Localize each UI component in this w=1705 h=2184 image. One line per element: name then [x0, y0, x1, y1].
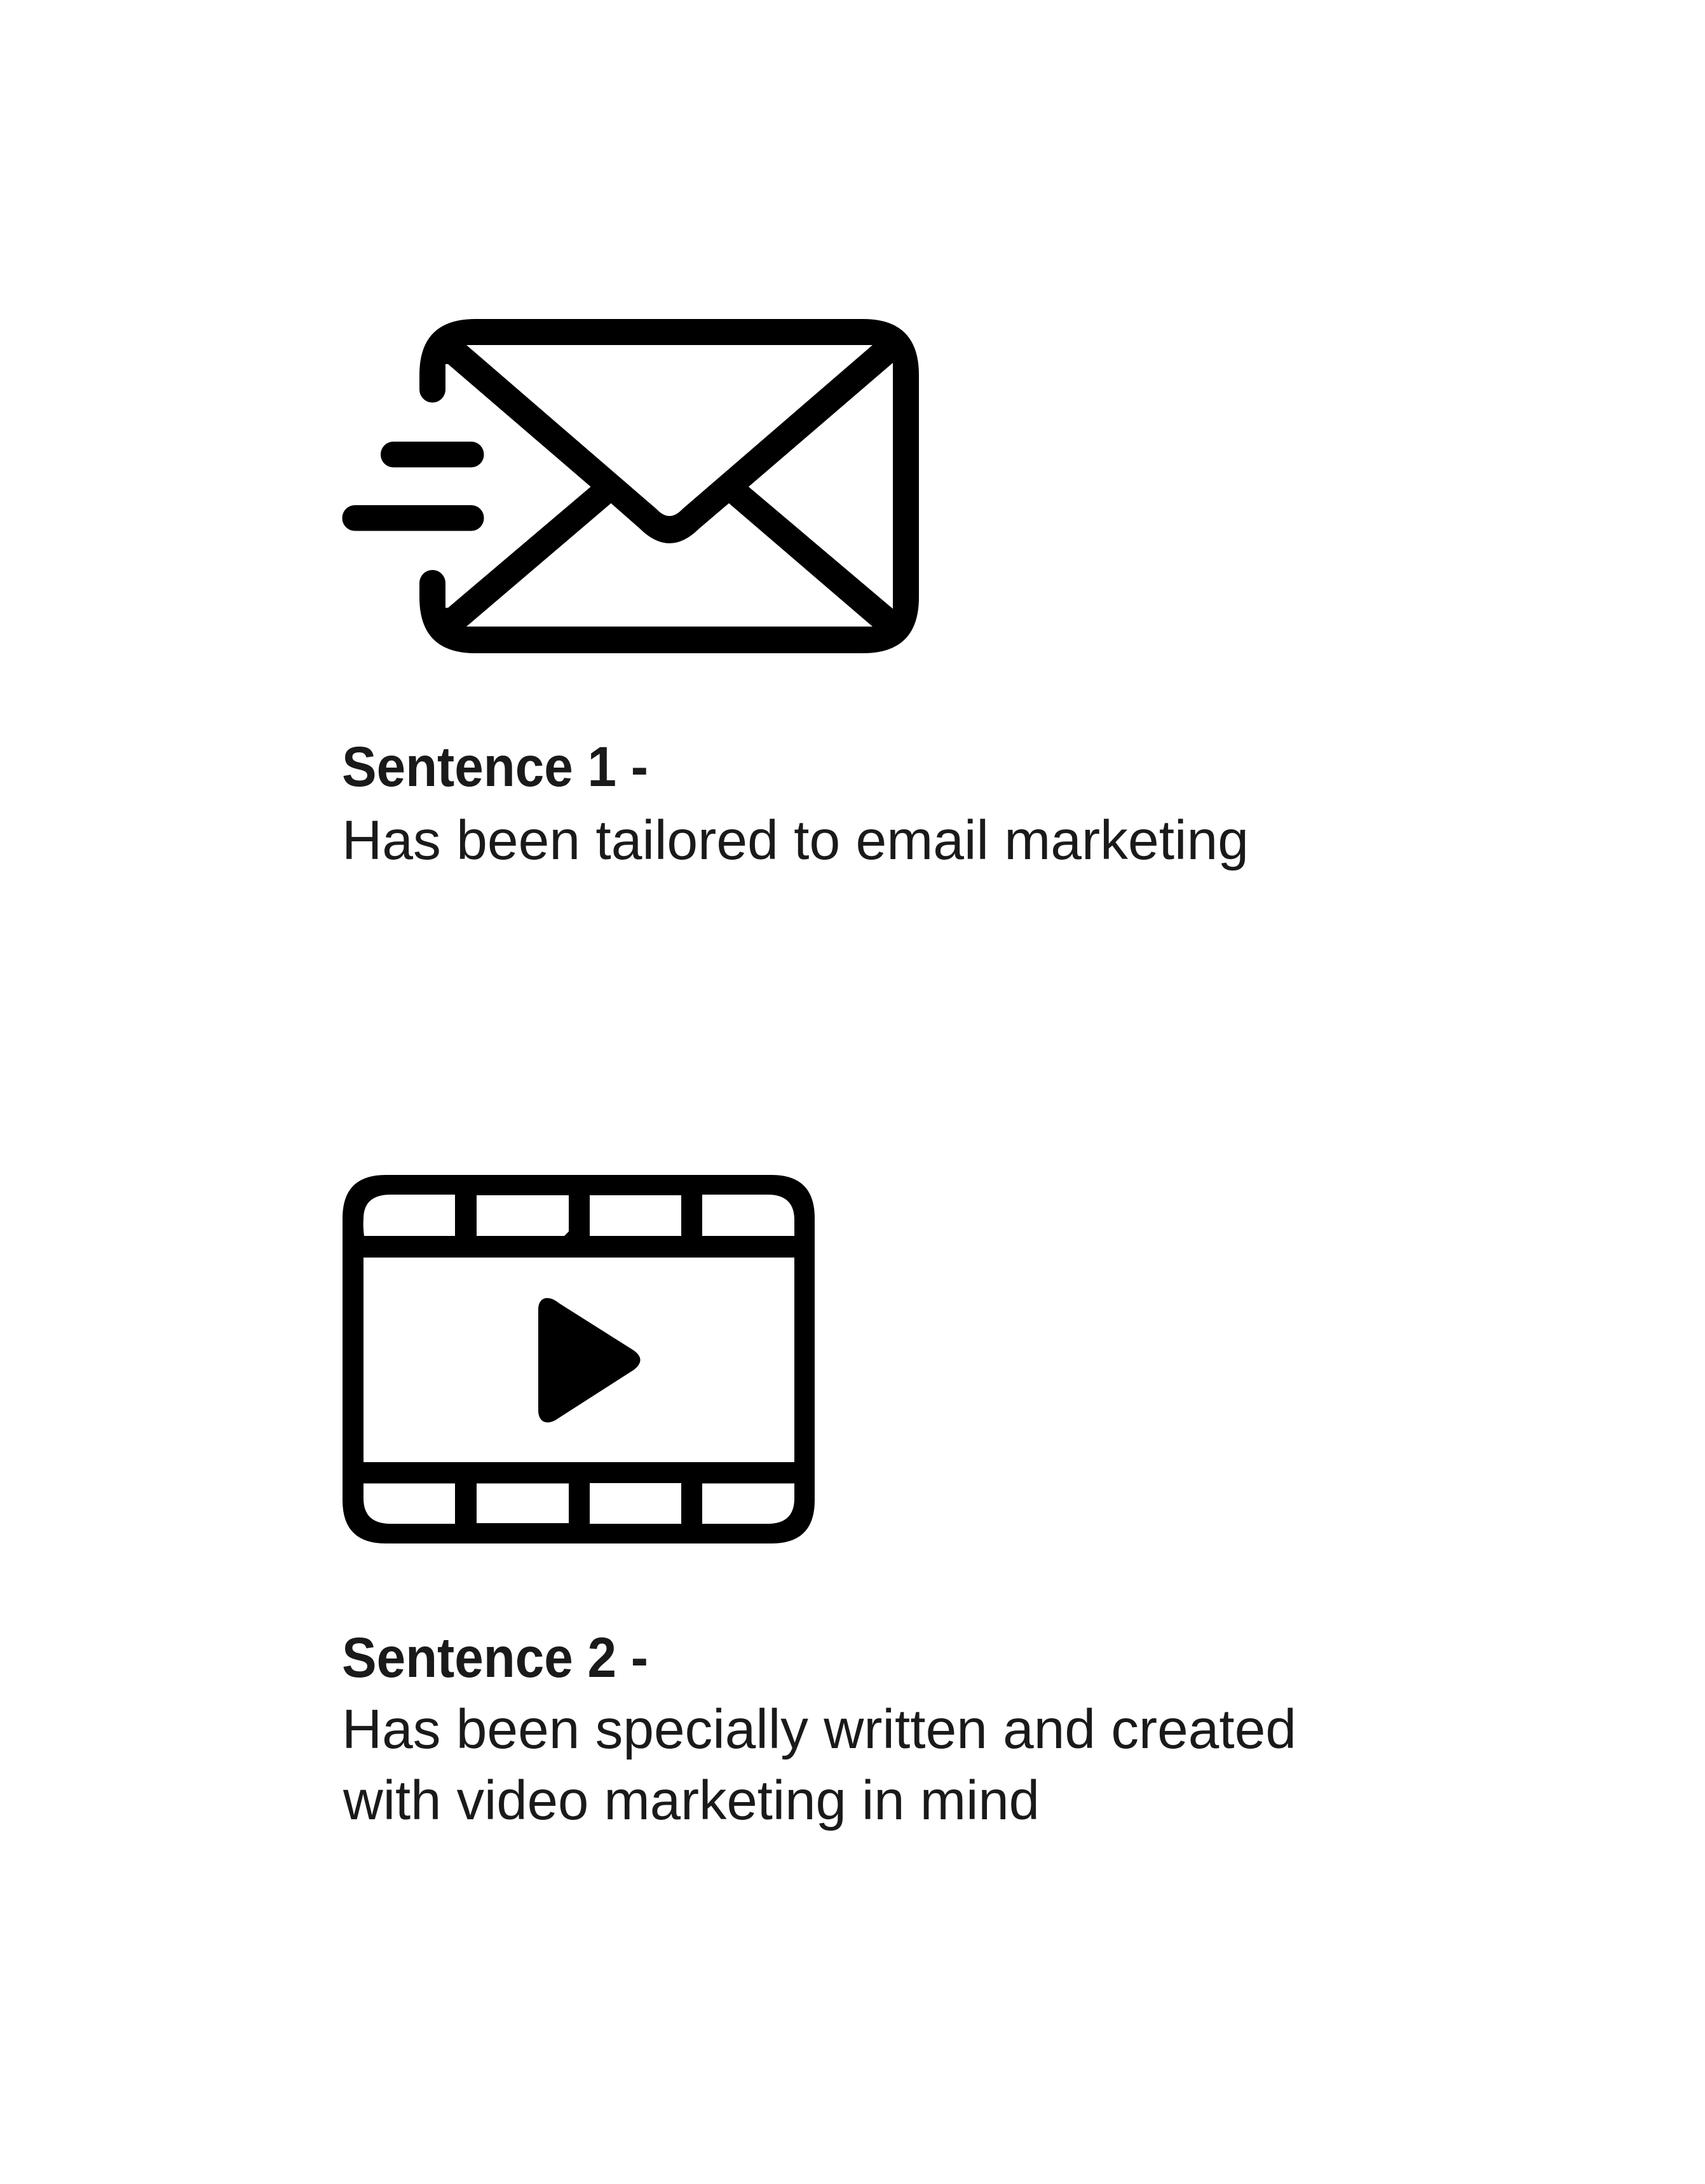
- text: sentence 2 description line 2: with video marketing in mind: [343, 1770, 1040, 1831]
- heading: sentence 2: Sentence 2 -: [342, 1625, 648, 1689]
- text: sentence 2 description line 1: Has been specially written and created: [342, 1699, 1296, 1760]
- icon: sending envelope: [342, 319, 919, 653]
- film frame with sprocket cells: [343, 1175, 815, 1543]
- envelope body with flap and folds: [419, 319, 919, 653]
- play triangle: [538, 1298, 641, 1422]
- icon: video film strip: [343, 1175, 815, 1543]
- motion line: upper: [381, 442, 484, 468]
- heading: sentence 1: Sentence 1 -: [342, 735, 648, 798]
- text: sentence 1 description: Has been tailored to email marketing: [342, 810, 1249, 871]
- motion line: lower: [342, 505, 484, 531]
